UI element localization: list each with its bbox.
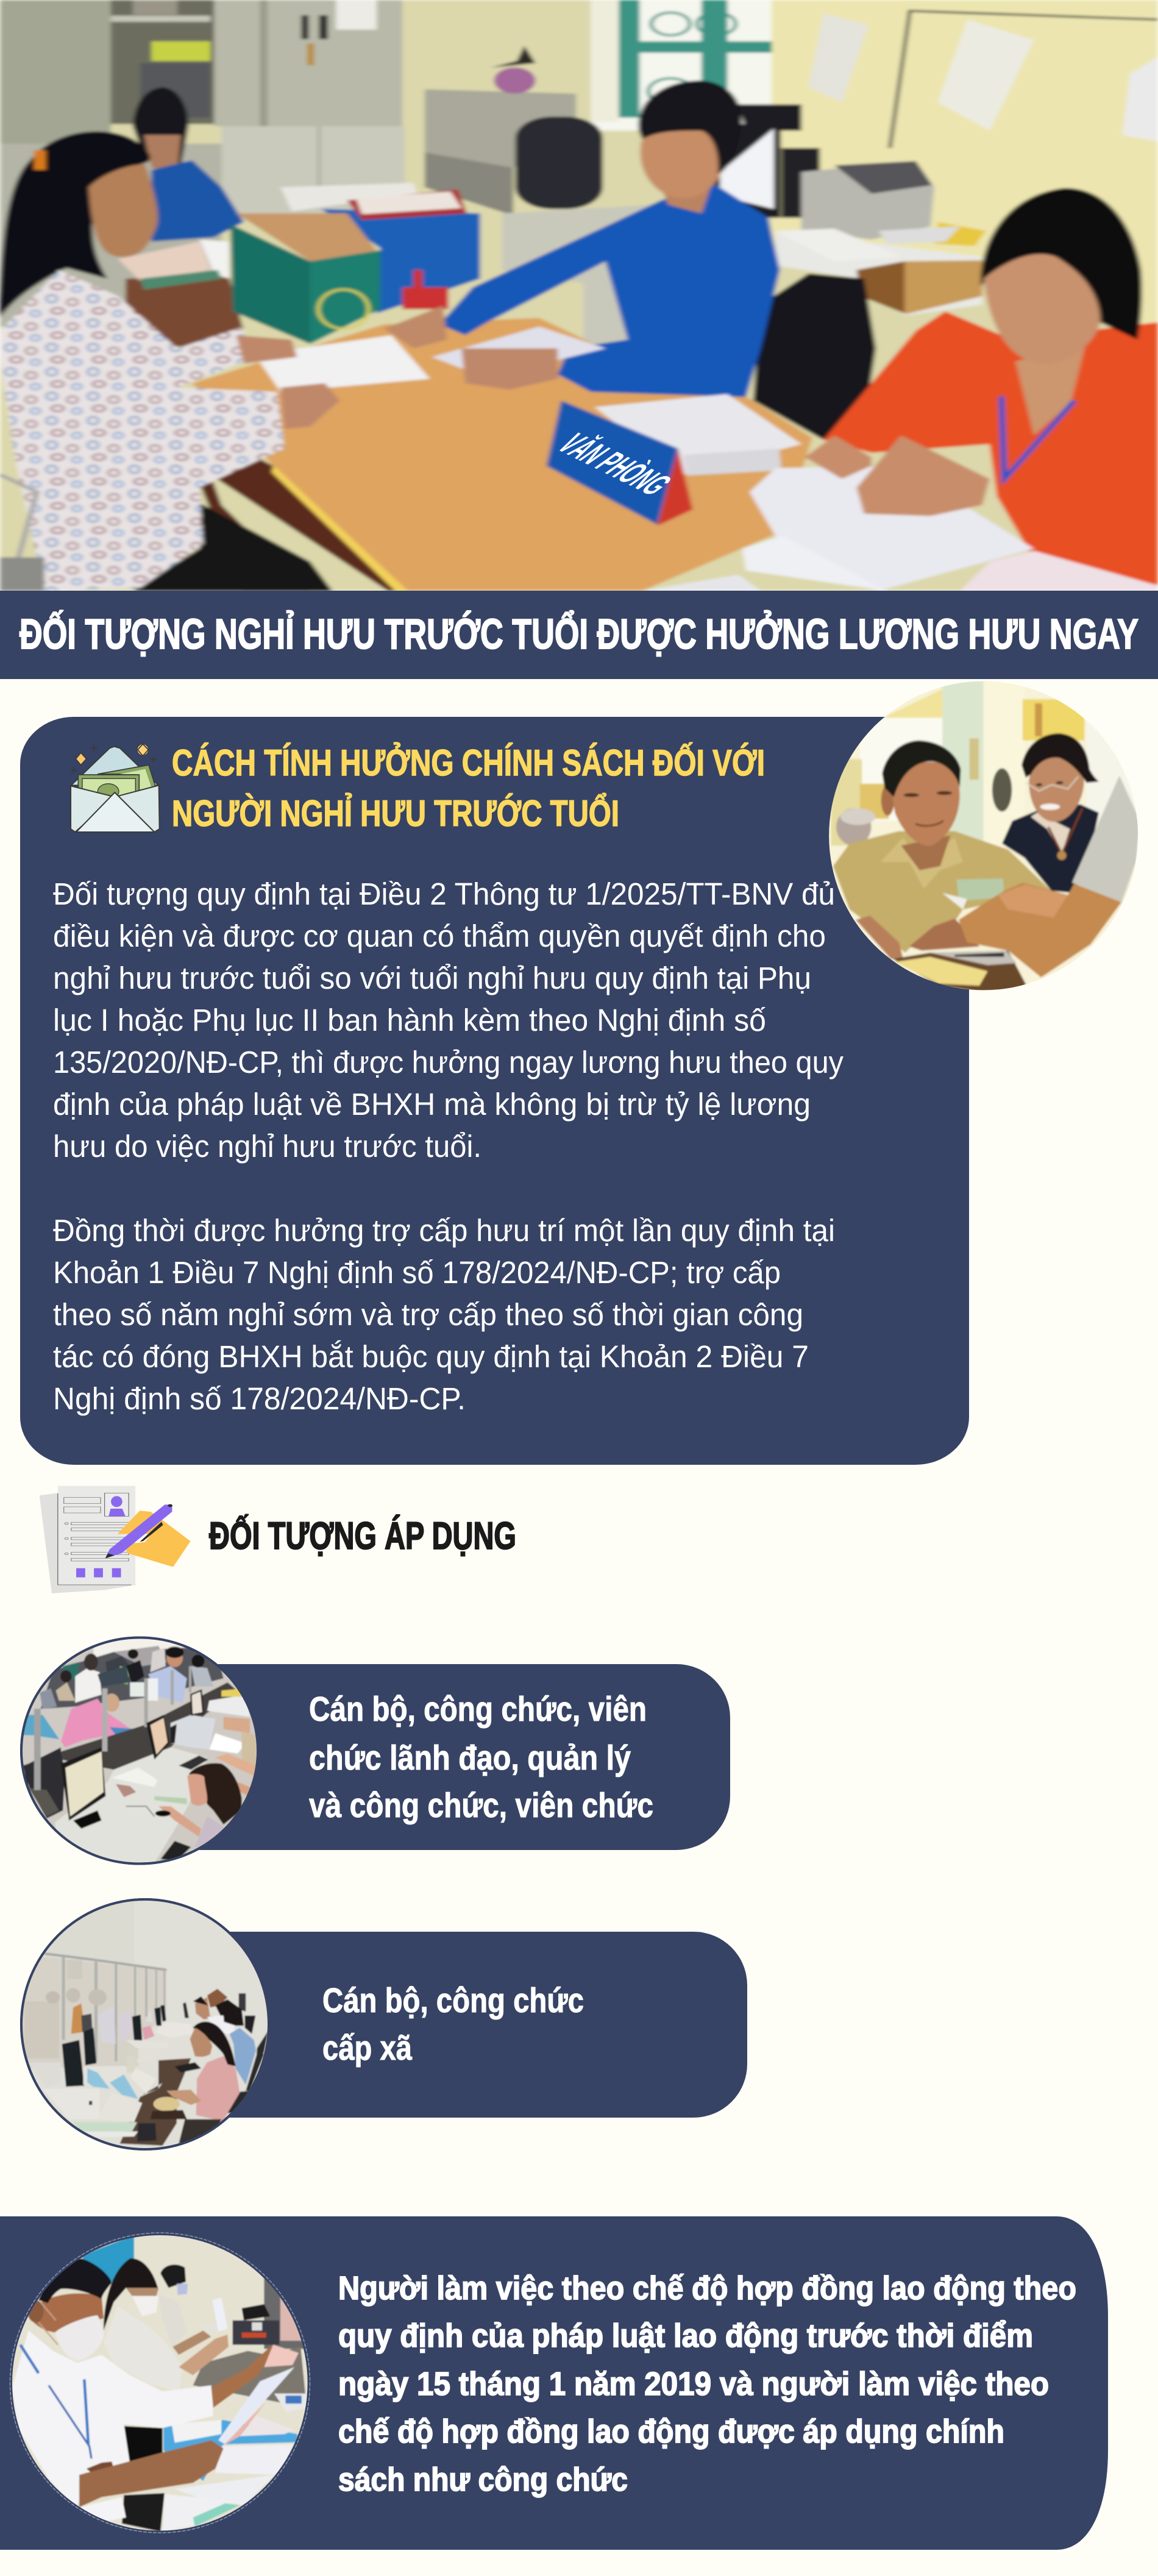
photo: retired couple counting money	[823, 677, 1146, 1000]
panel: commune officials	[134, 1932, 747, 2118]
body text: Khoản 1 Điều 7 Nghị định số 178/2024/NĐ-CP; trợ cấp	[53, 1255, 781, 1290]
panel: contract workers	[0, 2216, 1108, 2550]
panel text	[309, 1690, 653, 1825]
body text: 135/2020/NĐ-CP, thì được hưởng ngay lương hưu theo quy	[53, 1045, 844, 1080]
panel text: Cán bộ, công chức, viên	[309, 1690, 647, 1729]
body text: theo số năm nghỉ sớm và trợ cấp theo số thời gian công	[53, 1297, 803, 1332]
panel text: cấp xã	[322, 2029, 412, 2068]
panel text: chế độ hợp đồng lao động được áp dụng chính	[338, 2413, 1004, 2450]
body text: Nghị định số 178/2024/NĐ-CP.	[53, 1381, 466, 1416]
panel text: quy định của pháp luật lao động trước thời điểm	[338, 2318, 1033, 2354]
photo: commune service desks	[20, 1898, 268, 2151]
panel text: Người làm việc theo chế độ hợp đồng lao động theo	[338, 2270, 1076, 2307]
icon: money envelope	[71, 744, 160, 832]
photo ring	[21, 1899, 269, 2149]
body text: Đối tượng quy định tại Điều 2 Thông tư 1/2025/TT-BNV đủ	[53, 877, 835, 911]
hero photo: office staff at desk: VĂN PHÒNG	[548, 427, 681, 501]
panel text	[338, 2270, 1076, 2498]
panel text	[322, 1981, 584, 2068]
panel heading: NGƯỜI NGHỈ HƯU TRƯỚC TUỔI	[172, 793, 619, 834]
panel: officials and leaders	[122, 1664, 730, 1850]
panel text: ngày 15 tháng 1 năm 2019 và người làm việc theo	[338, 2366, 1049, 2402]
photo ring	[21, 1637, 258, 1864]
body text: hưu do việc nghỉ hưu trước tuổi.	[53, 1129, 481, 1164]
panel heading	[172, 742, 765, 834]
body text	[53, 877, 844, 1416]
section icon: form and pen	[40, 1486, 191, 1593]
photo: masked official reading papers	[12, 2235, 308, 2531]
body text: Đồng thời được hưởng trợ cấp hưu trí một lần quy định tại	[53, 1213, 835, 1248]
panel text: sách như công chức	[338, 2461, 628, 2498]
section heading: ĐỐI TƯỢNG ÁP DỤNG	[209, 1514, 516, 1557]
photo ring	[10, 2233, 310, 2533]
body text: định của pháp luật về BHXH mà không bị trừ tỷ lệ lương	[53, 1087, 811, 1122]
panel: pension calculation	[20, 717, 969, 1465]
panel text: và công chức, viên chức	[309, 1786, 653, 1825]
panel text: Cán bộ, công chức	[322, 1981, 584, 2020]
body text: tác có đóng BHXH bắt buộc quy định tại Khoản 2 Điều 7	[53, 1339, 809, 1374]
title banner	[0, 591, 1158, 679]
panel heading: CÁCH TÍNH HƯỞNG CHÍNH SÁCH ĐỐI VỚI	[172, 742, 765, 783]
panel text: chức lãnh đạo, quản lý	[309, 1738, 631, 1777]
body text: lục I hoặc Phụ lục II ban hành kèm theo Nghị định số	[53, 1003, 766, 1037]
hero photo: office staff at desk	[0, 0, 1158, 591]
body text: điều kiện và được cơ quan có thẩm quyền quyết định cho	[53, 919, 826, 953]
photo: busy public service counter	[20, 1636, 257, 1865]
body text: nghỉ hưu trước tuổi so với tuổi nghỉ hưu quy định tại Phụ	[53, 961, 811, 995]
